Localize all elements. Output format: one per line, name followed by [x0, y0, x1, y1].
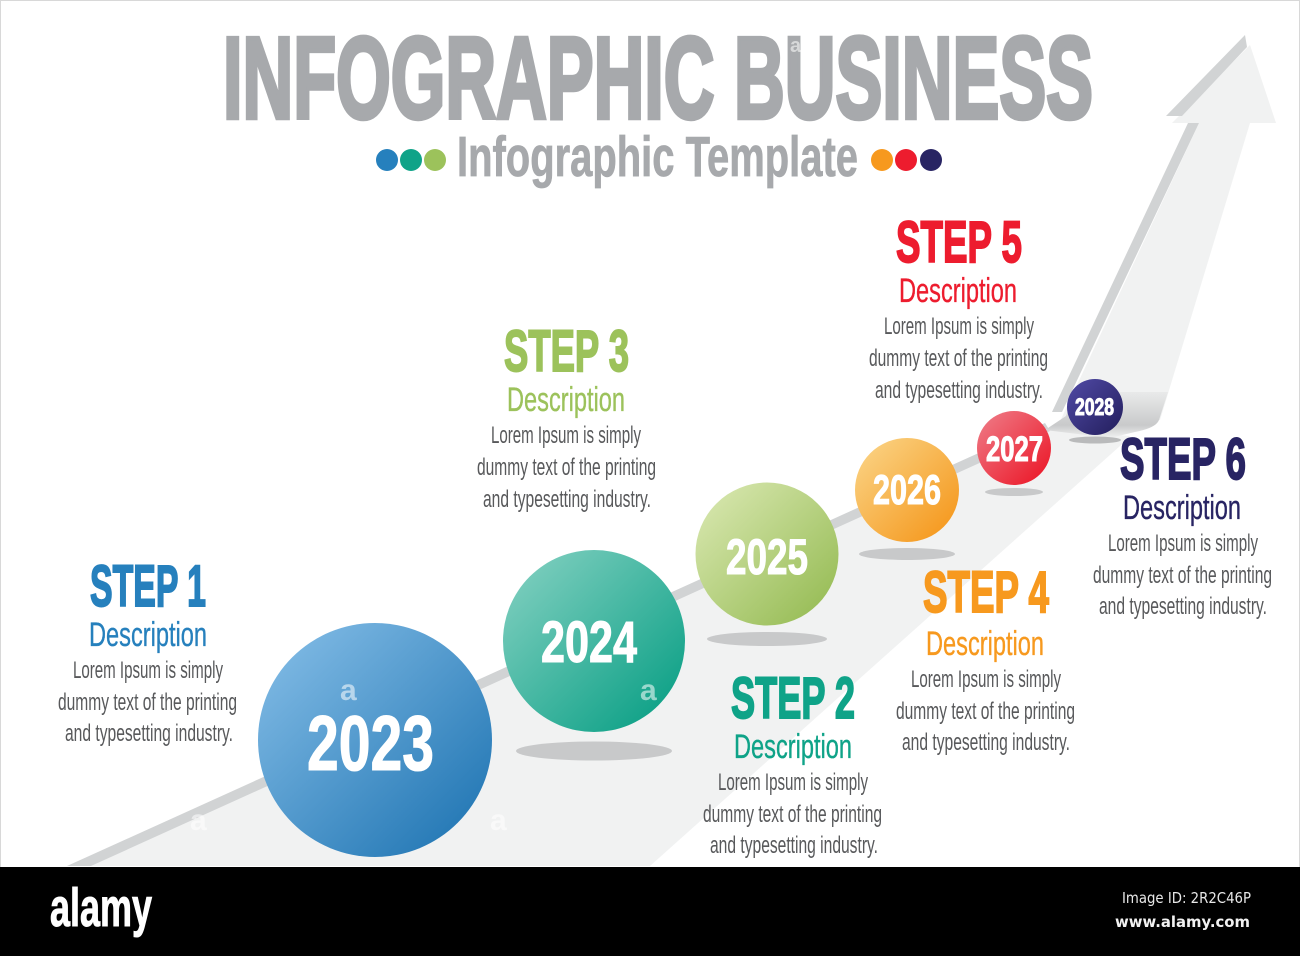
watermark marks: a [340, 674, 357, 707]
sphere 2024: 2024 [541, 610, 637, 675]
step 1 text block: Description [89, 616, 207, 654]
watermark marks [190, 35, 802, 837]
sphere 2024 [503, 550, 685, 760]
step 1 text block: STEP 1 [90, 554, 206, 619]
sphere 2028: 2028 [1075, 394, 1114, 421]
footer logo: alamy [50, 878, 152, 938]
step 5 text block: dummy text of the printing [869, 345, 1048, 372]
decorative dots: left [376, 149, 446, 171]
step 5 text block: and typesetting industry. [875, 377, 1043, 404]
step 5 text block: Lorem Ipsum is simply [884, 313, 1034, 340]
sphere 2028 [1067, 379, 1123, 444]
footer image id: Image ID: 2R2C46P [1122, 889, 1251, 907]
arrow: head edge stripe [1166, 35, 1247, 116]
step 6 text block: Description [1123, 489, 1241, 527]
watermark marks: a [640, 674, 657, 707]
sphere 2027: 2027 [986, 430, 1043, 469]
step 4 text block [896, 560, 1075, 756]
step 2 text block: Lorem Ipsum is simply [718, 769, 868, 796]
sphere 2023 [258, 623, 492, 857]
step 4 text block: dummy text of the printing [896, 698, 1075, 725]
step 4 text block: and typesetting industry. [902, 729, 1070, 756]
step 2 text block: and typesetting industry. [710, 832, 878, 859]
sphere 2025 [696, 482, 838, 646]
step 3 text block: STEP 3 [504, 319, 629, 384]
arrow: road edge stripe [67, 423, 1050, 866]
step 5 text block: STEP 5 [896, 210, 1022, 275]
footer url: www.alamy.com [1115, 913, 1250, 931]
step 2 text block: dummy text of the printing [703, 801, 882, 828]
sphere 2023: 2023 [307, 699, 434, 787]
subtitle: Infographic Template [457, 125, 858, 189]
step 4 text block: Description [926, 625, 1044, 663]
step 3 text block [477, 319, 656, 513]
step 4 text block: Lorem Ipsum is simply [911, 666, 1061, 693]
step 1 text block [58, 554, 237, 747]
footer bar [0, 867, 1300, 956]
sphere 2026 [855, 438, 959, 560]
step 1 text block: dummy text of the printing [58, 689, 237, 716]
arrow: shaft edge stripe [1052, 123, 1199, 412]
arrow: head [1172, 45, 1276, 123]
sphere 2027 [977, 411, 1051, 496]
step 4 text block: STEP 4 [923, 560, 1049, 625]
step 6 text block [1093, 427, 1272, 620]
step 1 text block: and typesetting industry. [65, 720, 233, 747]
watermark marks: a [490, 804, 507, 837]
arrow: road surface [91, 428, 1130, 866]
step 3 text block: Lorem Ipsum is simply [491, 422, 641, 449]
arrow: rising shaft [1056, 123, 1250, 430]
step 3 text block: Description [507, 381, 625, 419]
step 5 text block [869, 210, 1048, 404]
step 2 text block [703, 666, 882, 859]
watermark marks: a [790, 35, 802, 57]
decorative dots: right [871, 149, 942, 171]
arrow: fold shading [1045, 392, 1168, 438]
step 3 text block: and typesetting industry. [483, 486, 651, 513]
step 2 text block: Description [734, 728, 852, 766]
step 1 text block: Lorem Ipsum is simply [73, 657, 223, 684]
sphere 2025: 2025 [726, 529, 808, 585]
step 5 text block: Description [899, 272, 1017, 310]
watermark marks: a [190, 804, 207, 837]
step 3 text block: dummy text of the printing [477, 454, 656, 481]
step 2 text block: STEP 2 [731, 666, 855, 731]
sphere 2026: 2026 [873, 466, 941, 513]
